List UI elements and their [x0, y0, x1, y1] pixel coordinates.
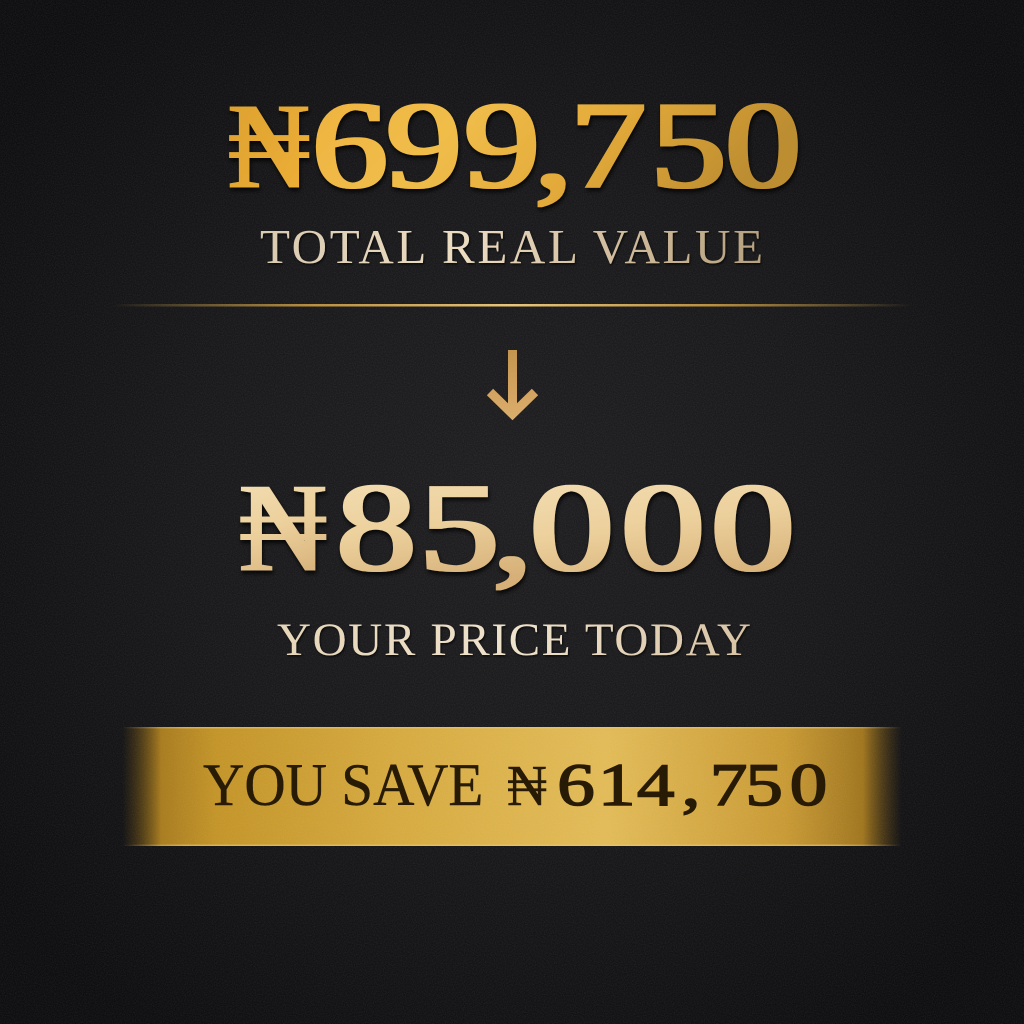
total value amount: 699,750 — [312, 76, 801, 214]
your price amount — [240, 457, 795, 598]
savings text: ₦ — [507, 755, 547, 818]
icon: down arrow — [490, 350, 535, 414]
your price label: YOUR PRICE TODAY — [277, 614, 751, 666]
total value amount: ₦ — [229, 80, 308, 214]
savings text — [203, 751, 827, 818]
your price amount: 000 — [530, 457, 795, 598]
total value label: TOTAL REAL VALUE — [260, 219, 763, 274]
your price amount: ₦ — [240, 459, 326, 598]
savings text: YOU SAVE — [203, 752, 483, 818]
your price amount: 85, — [337, 458, 532, 598]
savings banner — [122, 727, 902, 846]
savings text: 614,750 — [557, 751, 827, 818]
divider line — [112, 304, 912, 306]
